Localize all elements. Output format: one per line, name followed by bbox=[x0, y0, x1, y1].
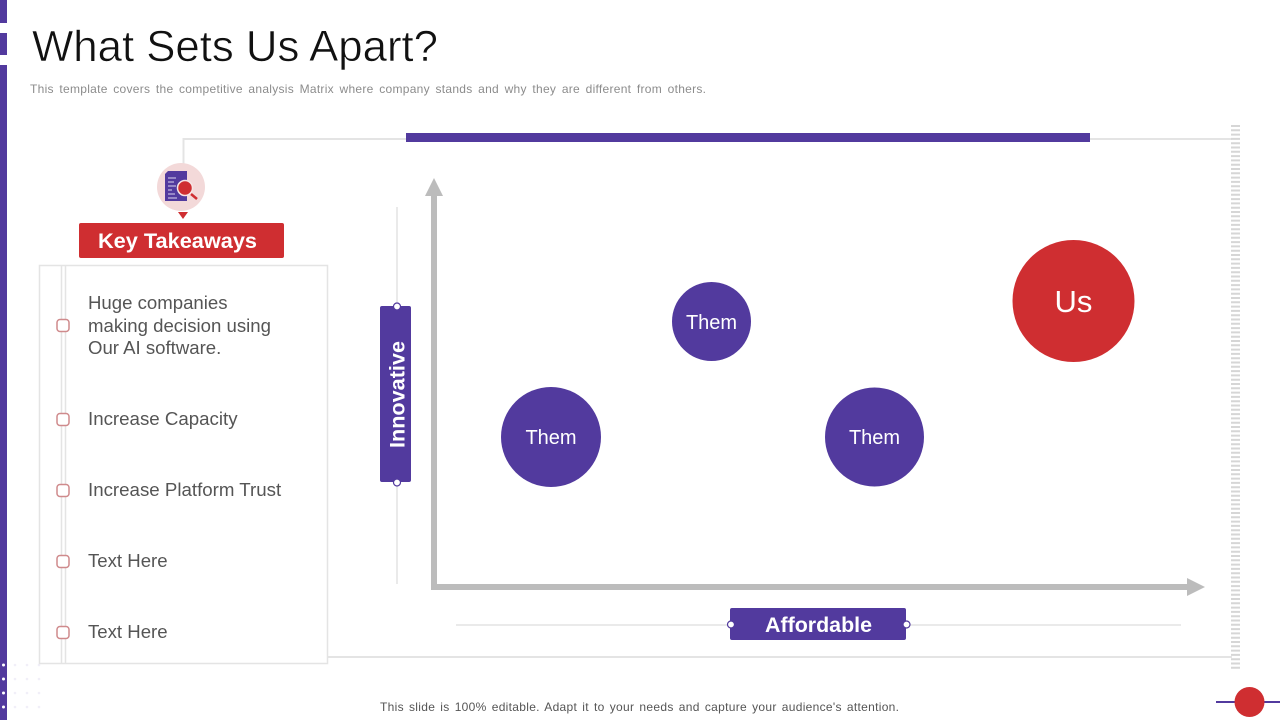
x axis label: affordable bbox=[456, 608, 1181, 640]
key takeaways banner: Key Takeaways bbox=[98, 230, 257, 253]
list item 1: Our AI software. bbox=[88, 337, 221, 358]
title: What Sets Us Apart? bbox=[32, 22, 438, 71]
y axis label: innovative bbox=[380, 207, 411, 584]
bubble: them top bbox=[672, 282, 751, 361]
list item 5: Text Here bbox=[88, 621, 168, 642]
x axis label: affordable: Affordable bbox=[765, 614, 872, 637]
bubble: them top: Them bbox=[686, 312, 737, 334]
panel: key takeaways list bbox=[40, 266, 328, 664]
footer note: This slide is 100% editable. Adapt it to your needs and capture your audience's attention. bbox=[380, 700, 899, 714]
list item 3: Increase Platform Trust bbox=[88, 479, 282, 500]
list item 1: Huge companies bbox=[88, 292, 228, 313]
dot pattern bbox=[2, 664, 40, 708]
list item 1: making decision using bbox=[88, 315, 271, 336]
matrix frame bbox=[184, 125, 1236, 669]
bubble: us: Us bbox=[1055, 284, 1092, 319]
left accent stripe bbox=[0, 0, 7, 720]
bubble: them left bbox=[501, 387, 601, 487]
icon: document with magnifier bbox=[157, 163, 205, 219]
page marker bbox=[1216, 687, 1280, 717]
key takeaways banner bbox=[79, 223, 284, 258]
y axis label: innovative: Innovative bbox=[386, 341, 410, 448]
purple top bar bbox=[406, 133, 1090, 142]
list item 2: Increase Capacity bbox=[88, 408, 238, 429]
list item 1 bbox=[57, 292, 276, 358]
bubble: them right: Them bbox=[849, 427, 900, 449]
bubble: us bbox=[1012, 240, 1134, 362]
subtitle: This template covers the competitive analysis Matrix where company stands and why they are different from others. bbox=[30, 82, 706, 96]
bubble: them left: Them bbox=[525, 427, 577, 449]
arrow: vertical axis bbox=[425, 178, 443, 590]
bubble: them right bbox=[825, 388, 924, 486]
arrow: horizontal axis bbox=[431, 578, 1205, 596]
list item 4: Text Here bbox=[88, 550, 168, 571]
